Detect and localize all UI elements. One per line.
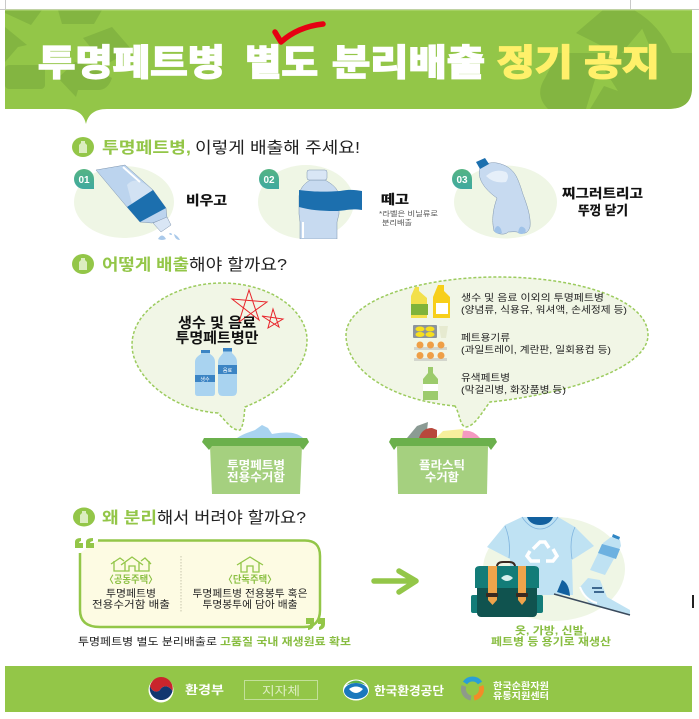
step 01: empty (74, 165, 227, 240)
text: coloured PET: 유색페트병 (461, 373, 510, 384)
t-shirt (487, 517, 594, 595)
panel: other PET speech bubble (346, 277, 648, 427)
title text: 투명페트병 (38, 42, 225, 83)
bottle tilted (96, 165, 171, 232)
panel: clear PET speech bubble: 생수 및 음료 (178, 315, 256, 332)
panel: housing instructions: 〈공동주택〉 (104, 574, 158, 586)
panel: other PET speech bubble: (양념류, 식용유, 워셔액, 손세정제 등) (461, 304, 627, 316)
box: local government: 지자체 (262, 684, 300, 698)
panel: housing instructions: 투명페트병 (106, 588, 156, 600)
heading: how to discard: 투명페트병, (102, 139, 191, 157)
bin: plastic collection (389, 422, 497, 494)
panel: other PET speech bubble: (막걸리병, 화장품병 등) (461, 384, 566, 396)
step 02: remove label: 분리배출 (382, 218, 413, 227)
panel: clear PET speech bubble: 투명페트병만 (176, 330, 258, 347)
logo: recycling distribution center: 한국순환자원 (493, 680, 549, 691)
bin: plastic collection: 플라스틱 (419, 459, 465, 472)
text: PET containers: 페트용기류 (461, 333, 510, 344)
step 03: crush and close cap (452, 158, 643, 238)
step 02: remove label: 02 (263, 175, 275, 186)
bin: plastic collection: 수거함 (425, 470, 459, 484)
panel: housing instructions: 전용수거함 배출 (92, 599, 170, 611)
heading: how to discard (72, 137, 360, 157)
heading: how should it be discarded: 해야 할까요? (189, 256, 287, 274)
title text (38, 42, 660, 83)
icon: oil bottles (411, 285, 450, 318)
step 03: crush and close cap: 찌그러트리고 (562, 186, 643, 201)
heading: why separate: 해서 버려야 할까요? (157, 509, 306, 527)
icon: trays and egg cartons (413, 325, 448, 361)
text: high-quality recycled resource (78, 635, 351, 648)
box: local government (244, 680, 318, 700)
panel: housing instructions: 투명봉투에 담아 배출 (202, 599, 298, 611)
logo: korea environment corporation (343, 680, 444, 700)
step 01: empty: 01 (78, 175, 90, 186)
panel: other PET speech bubble: (과일트레이, 계란판, 일회용컵 등) (461, 344, 611, 356)
bin: clear PET collection: 전용수거함 (227, 470, 285, 484)
icon: coloured bottle (423, 367, 438, 400)
logo: recycling distribution center (463, 679, 549, 701)
step 03: crush and close cap: 뚜껑 닫기 (578, 203, 628, 218)
bin: clear PET collection: 투명페트병 (227, 458, 285, 472)
backpack (471, 562, 543, 617)
heading: how should it be discarded (72, 254, 287, 274)
panel: housing instructions (75, 538, 325, 630)
heading: why separate: 왜 분리 (102, 509, 157, 527)
icon: water and drink bottles (195, 348, 237, 396)
text: high-quality recycled resource: 투명페트병 별도 분리배출로 (78, 636, 217, 648)
caption: 옷, 가방, 신발, (515, 624, 587, 637)
plastic bottle (590, 534, 621, 575)
panel: clear PET speech bubble (132, 283, 307, 430)
logo: korea environment corporation: 한국환경공단 (374, 683, 444, 698)
logo: ministry of environment (148, 677, 224, 702)
title banner (5, 10, 692, 124)
step 03: crush and close cap: 03 (456, 175, 468, 186)
footer band (5, 666, 692, 712)
icon: red check mark (275, 24, 323, 42)
title text: 분리배출 (332, 42, 485, 83)
bin: clear PET collection (202, 425, 309, 494)
heading: how to discard: 이렇게 배출해 주세요! (195, 139, 360, 157)
heading: how should it be discarded: 어떻게 배출 (102, 256, 189, 274)
heading: why separate (73, 508, 306, 527)
panel: housing instructions: 투명페트병 전용봉투 혹은 (192, 587, 308, 600)
text: beverages other: 생수 및 음료 이외의 투명페트병 (461, 292, 604, 304)
shoe (554, 578, 630, 615)
illustration: recycled products (471, 517, 630, 648)
arrow (374, 571, 416, 592)
step 01: empty: 비우고 (186, 193, 227, 208)
step 02: remove label: *라벨은 비닐류로 (379, 209, 439, 218)
icon: closing quotes (306, 618, 325, 630)
bottle with label (299, 170, 362, 239)
logo: ministry of environment: 환경부 (185, 683, 224, 697)
icon: water and drink bottles: 생수 (200, 376, 210, 383)
title text: 별도 (245, 42, 318, 83)
icon: opening quotes (75, 538, 94, 548)
step 02: remove label: 떼고 (381, 192, 409, 207)
icon: house (237, 557, 263, 572)
title text: 정기 공지 (497, 42, 660, 83)
icon: water and drink bottles: 음료 (223, 368, 232, 374)
step 02: remove label (258, 165, 439, 239)
icon: apartments (111, 557, 151, 571)
number badge (74, 169, 94, 189)
icon: red stars (232, 290, 283, 328)
illustration: recycled products: 페트병 등 용기로 재생산 (491, 635, 611, 648)
text: high-quality recycled resource: 고품질 국내 재생원료 확보 (220, 635, 351, 648)
logo: recycling distribution center: 유통지원센터 (493, 690, 549, 701)
crushed bottle (476, 158, 530, 234)
panel: housing instructions: 〈단독주택〉 (224, 574, 276, 586)
